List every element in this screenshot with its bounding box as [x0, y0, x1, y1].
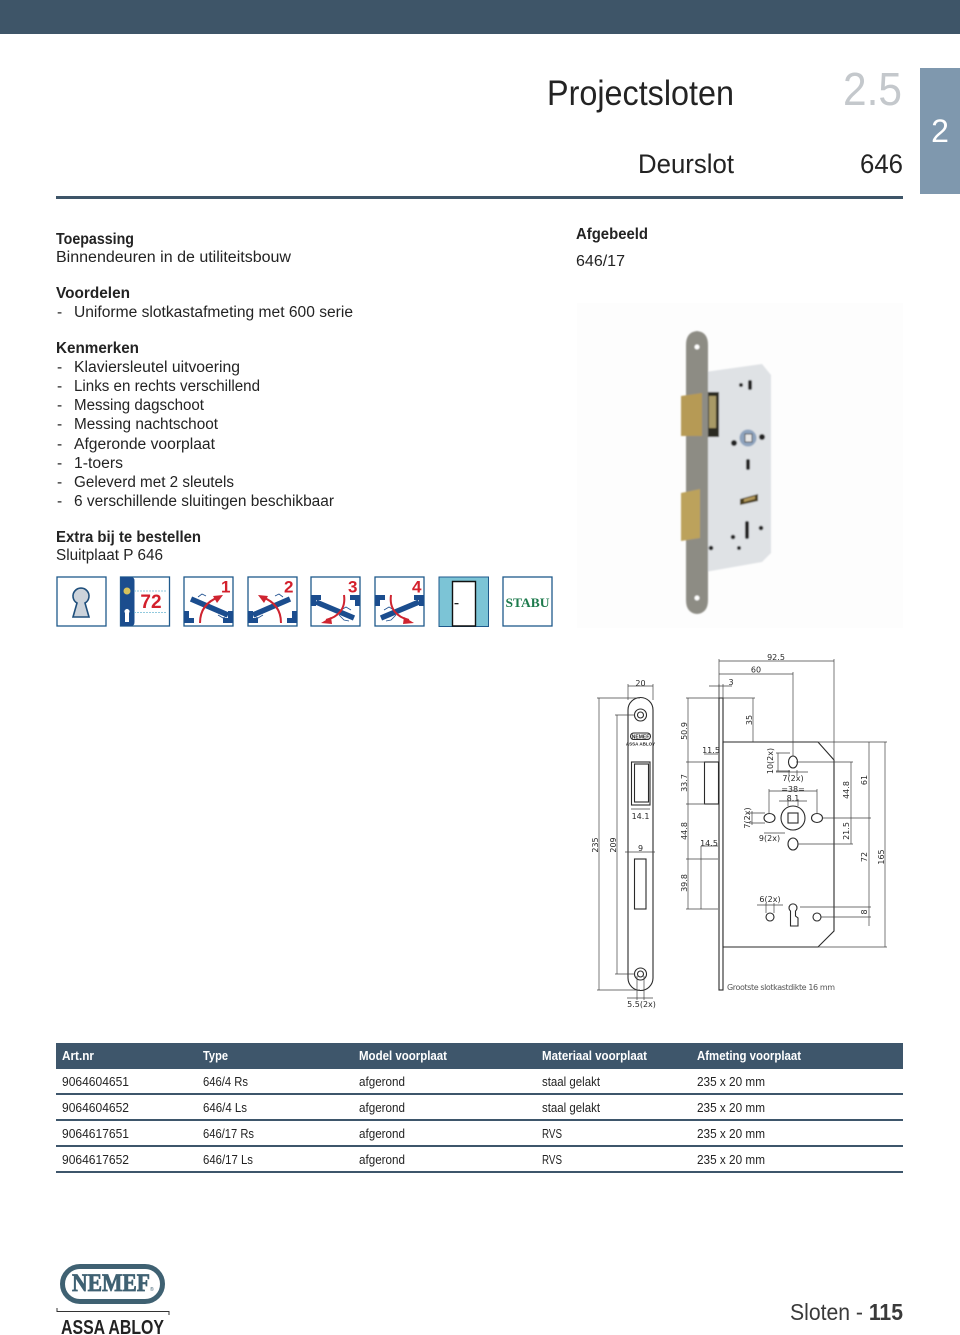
text block: Extra bij te bestellen: Extra bij te bestellen — [56, 529, 201, 546]
icon: door direction 3: 3 — [348, 578, 357, 596]
faceplate dimensions — [591, 679, 656, 1009]
technical drawing: faceplate view — [591, 679, 656, 1009]
table header: Materiaal voorplaat — [542, 1049, 648, 1063]
icon row — [57, 577, 552, 626]
text block: Afgebeeld — [576, 226, 648, 270]
lock dimensions: 8 — [860, 909, 869, 915]
table row 2: afgerond — [359, 1101, 405, 1115]
subtitle: Deurslot: Deurslot — [638, 149, 734, 179]
text block: Kenmerken: 1-toers — [74, 455, 123, 472]
table row 4: RVS — [542, 1153, 562, 1167]
icon: STABU: STABU — [506, 595, 550, 610]
table row 4: 9064617652 — [62, 1153, 129, 1167]
icon: door direction 1: 1 — [221, 578, 230, 596]
table header: Afmeting voorplaat — [697, 1049, 802, 1063]
lock dimensions: =38= — [781, 785, 805, 794]
table row 2: 235 x 20 mm — [697, 1101, 765, 1115]
lock dimensions: 44.8 — [680, 822, 689, 840]
table row 4 — [56, 1153, 903, 1173]
table row 1: 9064604651 — [62, 1075, 129, 1089]
icon: door — [439, 577, 488, 626]
table header: Model voorplaat — [359, 1049, 448, 1063]
chapter tab: 2 — [931, 113, 949, 149]
chapter tab — [920, 68, 960, 194]
text block: Extra bij te bestellen: Sluitplaat P 646 — [56, 547, 163, 564]
text block: Kenmerken: - — [57, 378, 62, 395]
lock dimensions: 6(2x) — [759, 895, 781, 904]
table — [56, 1043, 903, 1173]
table row 3: 235 x 20 mm — [697, 1127, 765, 1141]
dead bolt — [681, 489, 700, 541]
lock dimensions: 39.8 — [680, 874, 689, 892]
faceplate dimensions: 5.5(2x) — [627, 1000, 656, 1009]
table row 1: afgerond — [359, 1075, 405, 1089]
text block: Kenmerken: - — [57, 455, 62, 472]
table row 3: 646/17 Rs — [203, 1127, 254, 1141]
lock dimensions: 165 — [877, 849, 886, 865]
table row 2: 646/4 Ls — [203, 1101, 247, 1115]
table row 1: 646/4 Rs — [203, 1075, 248, 1089]
icon: door direction 2: 2 — [284, 578, 293, 596]
lock dimensions: 21.5 — [842, 822, 851, 840]
table header: Art.nr — [62, 1049, 94, 1063]
page number: Sloten - 115 — [790, 1299, 903, 1325]
title: Projectsloten: Projectsloten — [547, 74, 734, 113]
lock dimensions: 92.5 — [767, 653, 785, 662]
faceplate dimensions: 9 — [638, 844, 643, 853]
logo: Nemef Assa Abloy: NEMEF — [72, 1270, 150, 1297]
text block: Kenmerken — [56, 340, 334, 510]
text block: Voordelen: - — [57, 304, 62, 321]
faceplate dimensions: 20 — [635, 679, 646, 688]
section number: 2.5 — [843, 63, 902, 115]
icon: backset 72: 72 — [140, 592, 162, 613]
lock case — [705, 364, 771, 572]
table row 2: 9064604652 — [62, 1101, 129, 1115]
lock dimensions: 3 — [728, 678, 734, 687]
logo: Nemef Assa Abloy — [57, 1266, 169, 1335]
drawing note: Grootste slotkastdikte 16 mm — [727, 983, 835, 992]
spindle — [740, 430, 756, 446]
text block: Toepassing — [56, 231, 292, 266]
table row 2: staal gelakt — [542, 1101, 600, 1115]
lock dimensions: 35 — [745, 715, 754, 725]
text block: Kenmerken: - — [57, 397, 62, 414]
text block: Toepassing: Toepassing — [56, 231, 134, 248]
lock dimensions: 44.8 — [842, 781, 851, 799]
text block: Voordelen — [56, 285, 353, 321]
table row 1: staal gelakt — [542, 1075, 600, 1089]
latch recess — [706, 392, 719, 437]
icon: door direction 4: 4 — [412, 578, 422, 596]
table row 3 — [56, 1127, 903, 1147]
lock dimensions: 11.5 — [702, 746, 720, 755]
lock case outline — [704, 698, 834, 990]
lock dimensions: 8.1 — [787, 794, 799, 803]
faceplate dimensions: 209 — [609, 837, 618, 853]
icon: STABU — [503, 577, 552, 626]
product number: 646 — [860, 149, 903, 179]
text block: Kenmerken: Links en rechts verschillend — [74, 378, 260, 395]
lock dimensions: 9(2x) — [759, 834, 780, 843]
icon: door direction 3 — [311, 577, 360, 626]
lock dimensions: 60 — [751, 666, 761, 674]
text block: Kenmerken: - — [57, 436, 62, 453]
text block: Kenmerken: Kenmerken — [56, 340, 139, 357]
product photo: lock — [577, 303, 903, 628]
lock dimensions: 72 — [860, 852, 869, 862]
text block: Afgebeeld: 646/17 — [576, 253, 625, 270]
icon: door direction 4 — [375, 577, 424, 626]
lock dimensions: 50.9 — [680, 722, 689, 740]
holes — [731, 440, 737, 446]
table row 1: 235 x 20 mm — [697, 1075, 765, 1089]
text block: Kenmerken: Messing dagschoot — [74, 397, 205, 414]
table row 2 — [56, 1101, 903, 1121]
faceplate outline: NEMEF — [632, 734, 649, 740]
text block: Extra bij te bestellen — [56, 529, 201, 564]
faceplate dimensions: 14.1 — [632, 812, 649, 821]
faceplate outline: ASSA ABLOY — [626, 742, 655, 746]
lock dimensions: 33.7 — [680, 774, 689, 792]
faceplate outline — [626, 698, 655, 990]
text block: Kenmerken: Geleverd met 2 sleutels — [74, 474, 234, 491]
lock dimensions: 61 — [860, 775, 869, 785]
header rule — [56, 196, 903, 199]
icon: keyhole — [57, 577, 106, 626]
text block: Kenmerken: Klaviersleutel uitvoering — [74, 359, 240, 376]
icon: door direction 1 — [184, 577, 233, 626]
text block: Kenmerken: - — [57, 493, 62, 510]
top band — [0, 0, 960, 34]
text block: Afgebeeld: Afgebeeld — [576, 226, 648, 243]
latch bolt — [681, 393, 702, 436]
table row 4: 235 x 20 mm — [697, 1153, 765, 1167]
text block: Kenmerken: 6 verschillende sluitingen beschikbaar — [74, 493, 334, 510]
lock dimensions: 10(2x) — [766, 748, 775, 774]
table header — [56, 1043, 903, 1069]
faceplate dimensions: 235 — [591, 837, 600, 853]
table row 3: 9064617651 — [62, 1127, 129, 1141]
text block: Voordelen: Voordelen — [56, 285, 130, 302]
lock dimensions: 7(2x) — [743, 807, 752, 829]
table row 3: afgerond — [359, 1127, 405, 1141]
icon: door direction 2 — [248, 577, 297, 626]
table row 3: RVS — [542, 1127, 562, 1141]
table row 4: 646/17 Ls — [203, 1153, 253, 1167]
text block: Kenmerken: - — [57, 359, 62, 376]
text block: Voordelen: Uniforme slotkastafmeting met 600 serie — [74, 304, 353, 321]
text block: Kenmerken: Afgeronde voorplaat — [74, 436, 216, 453]
technical drawing: side view — [680, 653, 887, 992]
lock dimensions: 7(2x) — [782, 774, 804, 783]
text block: Kenmerken: Messing nachtschoot — [74, 416, 219, 433]
table header: Type — [203, 1049, 228, 1063]
text block: Toepassing: Binnendeuren in de utiliteitsbouw — [56, 249, 292, 266]
logo: Nemef Assa Abloy: ® — [150, 1286, 154, 1293]
table row 1 — [56, 1075, 903, 1095]
icon: backset 72 — [120, 577, 170, 626]
faceplate — [686, 331, 708, 614]
lock dimensions: 14.5 — [700, 839, 718, 848]
text block: Kenmerken: - — [57, 474, 62, 491]
text block: Kenmerken: - — [57, 416, 62, 433]
table row 4: afgerond — [359, 1153, 405, 1167]
lock dimensions — [680, 653, 887, 947]
